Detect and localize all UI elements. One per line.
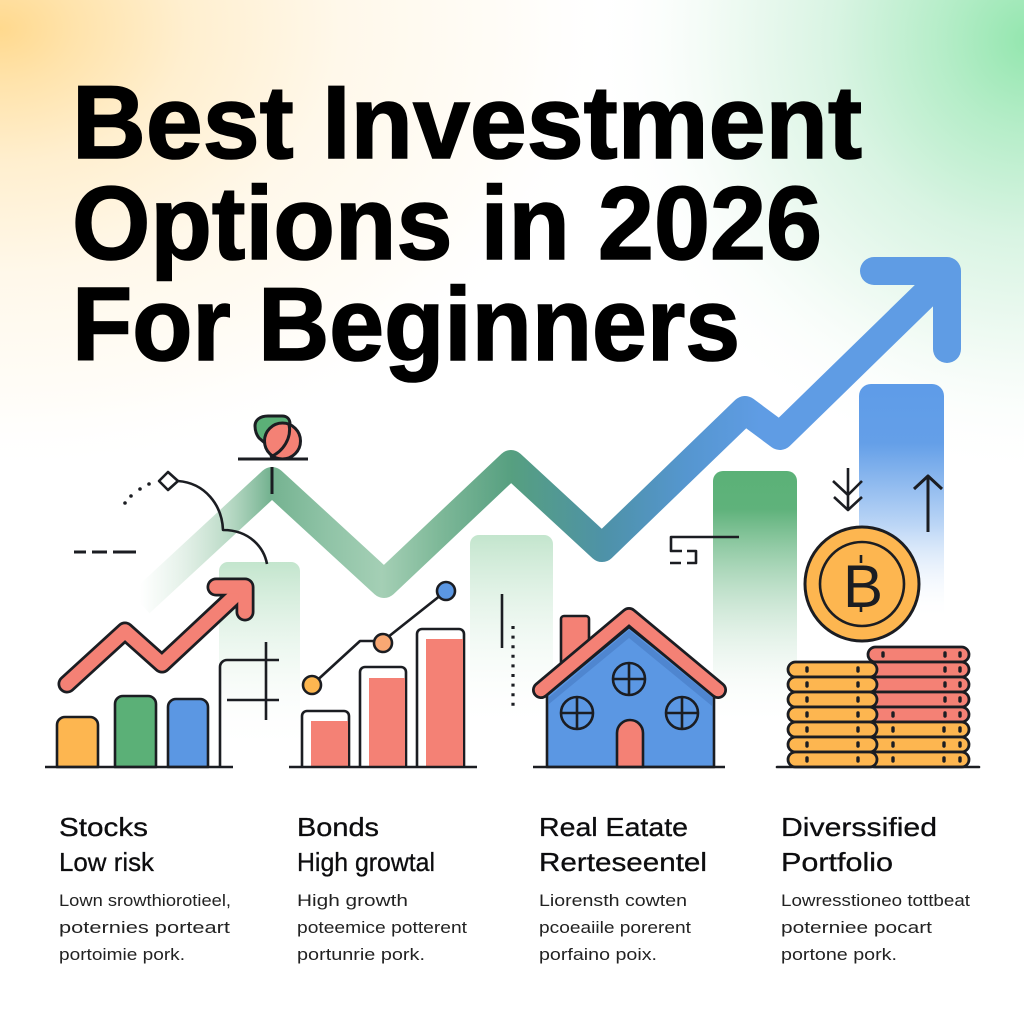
icon: coin: B bbox=[843, 553, 883, 620]
text block: stocks: Low risk bbox=[59, 847, 155, 877]
text block: diversified portfolio: Portfolio bbox=[781, 847, 893, 877]
text block: diversified portfolio bbox=[781, 812, 970, 964]
arrows above coin bbox=[833, 468, 942, 532]
bonds bars bbox=[302, 629, 464, 767]
text block: bonds: Bonds bbox=[297, 812, 379, 842]
icon: coin bbox=[805, 527, 919, 641]
text block: real estate: Rerteseentel bbox=[539, 847, 707, 877]
connected trend line bbox=[303, 582, 455, 694]
text block: diversified portfolio: poterniee pocart bbox=[781, 918, 932, 937]
text block: real estate: pcoeaiile porerent bbox=[539, 918, 691, 937]
title: For Beginners bbox=[72, 267, 740, 383]
red arrow bbox=[67, 587, 245, 684]
text block: diversified portfolio: Diverssified bbox=[781, 812, 937, 842]
rising trend arrow bbox=[140, 271, 947, 603]
text block: diversified portfolio: portone pork. bbox=[781, 945, 897, 964]
title bbox=[72, 65, 862, 383]
title: Best Investment bbox=[72, 65, 862, 181]
text block: bonds: High growth bbox=[297, 891, 408, 910]
cross lines bbox=[220, 642, 279, 767]
text block: stocks bbox=[59, 812, 231, 964]
text block: real estate: porfaino poix. bbox=[539, 945, 657, 964]
background column: pale green 1 bbox=[219, 562, 300, 752]
background column: blue bbox=[859, 384, 944, 620]
text block: real estate bbox=[539, 812, 707, 964]
yellow front stack bbox=[788, 662, 877, 767]
title: Options in 2026 bbox=[72, 166, 822, 282]
text block: stocks: Stocks bbox=[59, 812, 148, 842]
icon: stocks chart bbox=[45, 587, 279, 767]
text block: diversified portfolio: Lowresstioneo tottbeat bbox=[781, 891, 970, 910]
icon: bonds chart bbox=[289, 582, 477, 767]
background column: green bbox=[713, 471, 797, 726]
text block: stocks: poternies porteart bbox=[59, 918, 230, 937]
text block: real estate: Liorensth cowten bbox=[539, 891, 687, 910]
decorative arc with diamond bbox=[74, 472, 267, 564]
house body bbox=[547, 627, 714, 767]
text block: real estate: Real Eatate bbox=[539, 812, 688, 842]
roof shadow bbox=[549, 630, 712, 706]
decorative bracket glyph bbox=[670, 537, 739, 563]
text block: bonds: poteemice potterent bbox=[297, 918, 467, 937]
background column: pale green 2 bbox=[470, 535, 553, 730]
text block: bonds: portunrie pork. bbox=[297, 945, 425, 964]
text block: stocks: portoimie pork. bbox=[59, 945, 185, 964]
icon: stacked coins bbox=[777, 647, 979, 767]
small balance icon on peak bbox=[238, 416, 308, 494]
door bbox=[617, 720, 643, 767]
vertical tick and dotted line bbox=[502, 594, 513, 708]
red and yellow back stack bbox=[868, 647, 969, 767]
roof bbox=[541, 616, 718, 690]
chimney bbox=[561, 616, 589, 667]
text block: bonds bbox=[297, 812, 467, 964]
stock bars bbox=[57, 696, 208, 767]
text block: bonds: High growtal bbox=[297, 847, 435, 877]
icon: house bbox=[533, 616, 725, 767]
text block: stocks: Lown srowthiorotieel, bbox=[59, 891, 231, 910]
windows bbox=[561, 663, 698, 729]
